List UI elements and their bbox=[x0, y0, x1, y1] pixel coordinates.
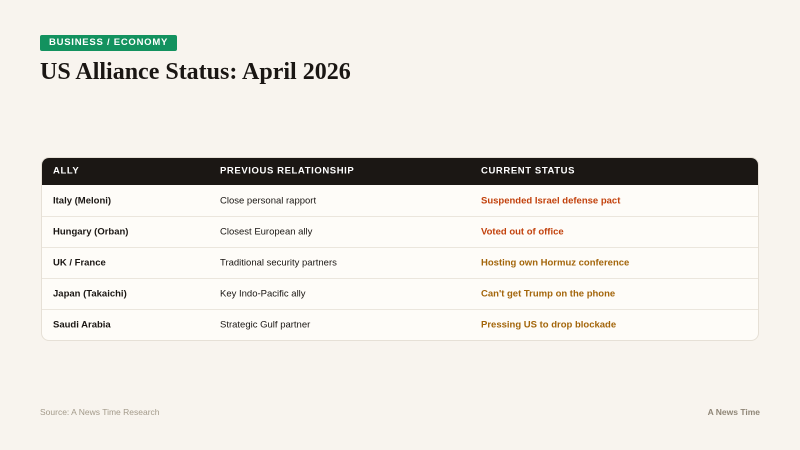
row: Japan: Key Indo-Pacific ally bbox=[220, 288, 306, 300]
row: Hungary: Hungary (Orban) bbox=[53, 226, 128, 238]
table: alliance status bbox=[41, 157, 759, 341]
row: UK / France: UK / France bbox=[53, 258, 106, 268]
row: Japan: Can't get Trump on the phone bbox=[481, 288, 615, 300]
row: Hungary: Voted out of office bbox=[481, 226, 564, 238]
table header: PREVIOUS RELATIONSHIP bbox=[220, 166, 354, 176]
row: Hungary bbox=[42, 216, 758, 247]
row: Italy: Italy (Meloni) bbox=[53, 195, 111, 206]
row: Saudi Arabia: Saudi Arabia bbox=[53, 320, 111, 330]
table header bbox=[42, 157, 758, 185]
row: Hungary: Closest European ally bbox=[220, 226, 312, 238]
row: UK / France bbox=[42, 247, 758, 278]
row: Saudi Arabia: Pressing US to drop blockade bbox=[481, 320, 616, 330]
source note: Source: A News Time Research bbox=[40, 407, 160, 417]
brand: A News Time bbox=[708, 407, 760, 417]
row: UK / France: Traditional security partners bbox=[220, 258, 337, 268]
row: Japan: Japan (Takaichi) bbox=[53, 288, 127, 300]
category tag: BUSINESS / ECONOMY bbox=[49, 37, 168, 48]
row: Italy: Suspended Israel defense pact bbox=[481, 195, 620, 206]
row: Japan bbox=[42, 278, 758, 309]
table header: ALLY bbox=[53, 166, 79, 176]
table header: CURRENT STATUS bbox=[481, 166, 575, 176]
row: Saudi Arabia: Strategic Gulf partner bbox=[220, 320, 310, 330]
row: Italy: Close personal rapport bbox=[220, 195, 316, 206]
row: Saudi Arabia bbox=[42, 309, 758, 340]
row: UK / France: Hosting own Hormuz conference bbox=[481, 258, 629, 268]
category tag bbox=[40, 35, 177, 51]
row: Italy bbox=[53, 195, 620, 206]
title: US Alliance Status: April 2026 bbox=[40, 59, 351, 85]
